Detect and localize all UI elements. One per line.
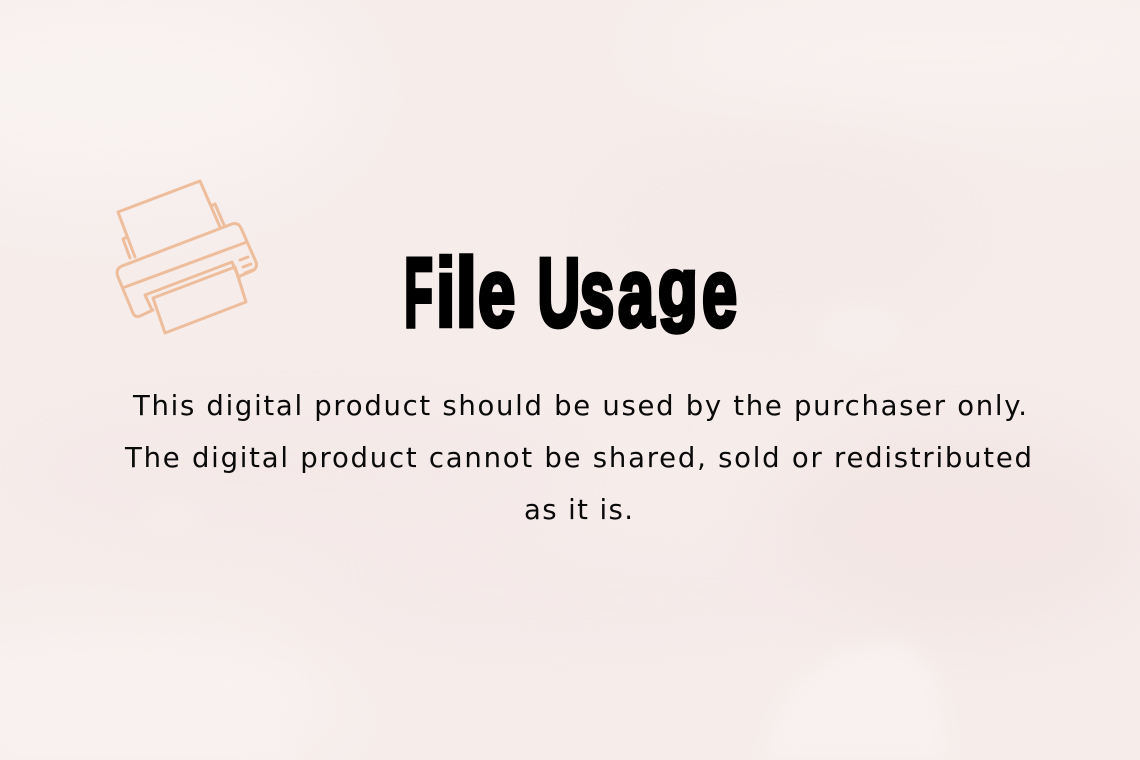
line 3: as it is. [524,494,633,526]
title: g [658,241,698,333]
description text [124,390,1032,526]
printer buttons [240,257,253,273]
title [404,238,737,348]
printer body [117,224,256,317]
title: e [702,239,737,347]
printer paper tray [123,204,224,258]
printer output slot [145,262,239,310]
printer body divider [125,242,247,287]
title: e [478,239,515,347]
printer output paper [153,267,246,333]
line 2: The digital product cannot be shared, sold or redistributed [124,442,1032,474]
title: U [538,239,580,348]
title: a [618,239,655,347]
title: i [436,238,455,347]
title: s [580,239,614,347]
line 1: This digital product should be used by the purchaser only. [132,390,1027,422]
printer paper sheet [118,181,220,257]
icon: printer [117,181,256,333]
title: l [456,238,477,347]
title: F [404,239,433,348]
